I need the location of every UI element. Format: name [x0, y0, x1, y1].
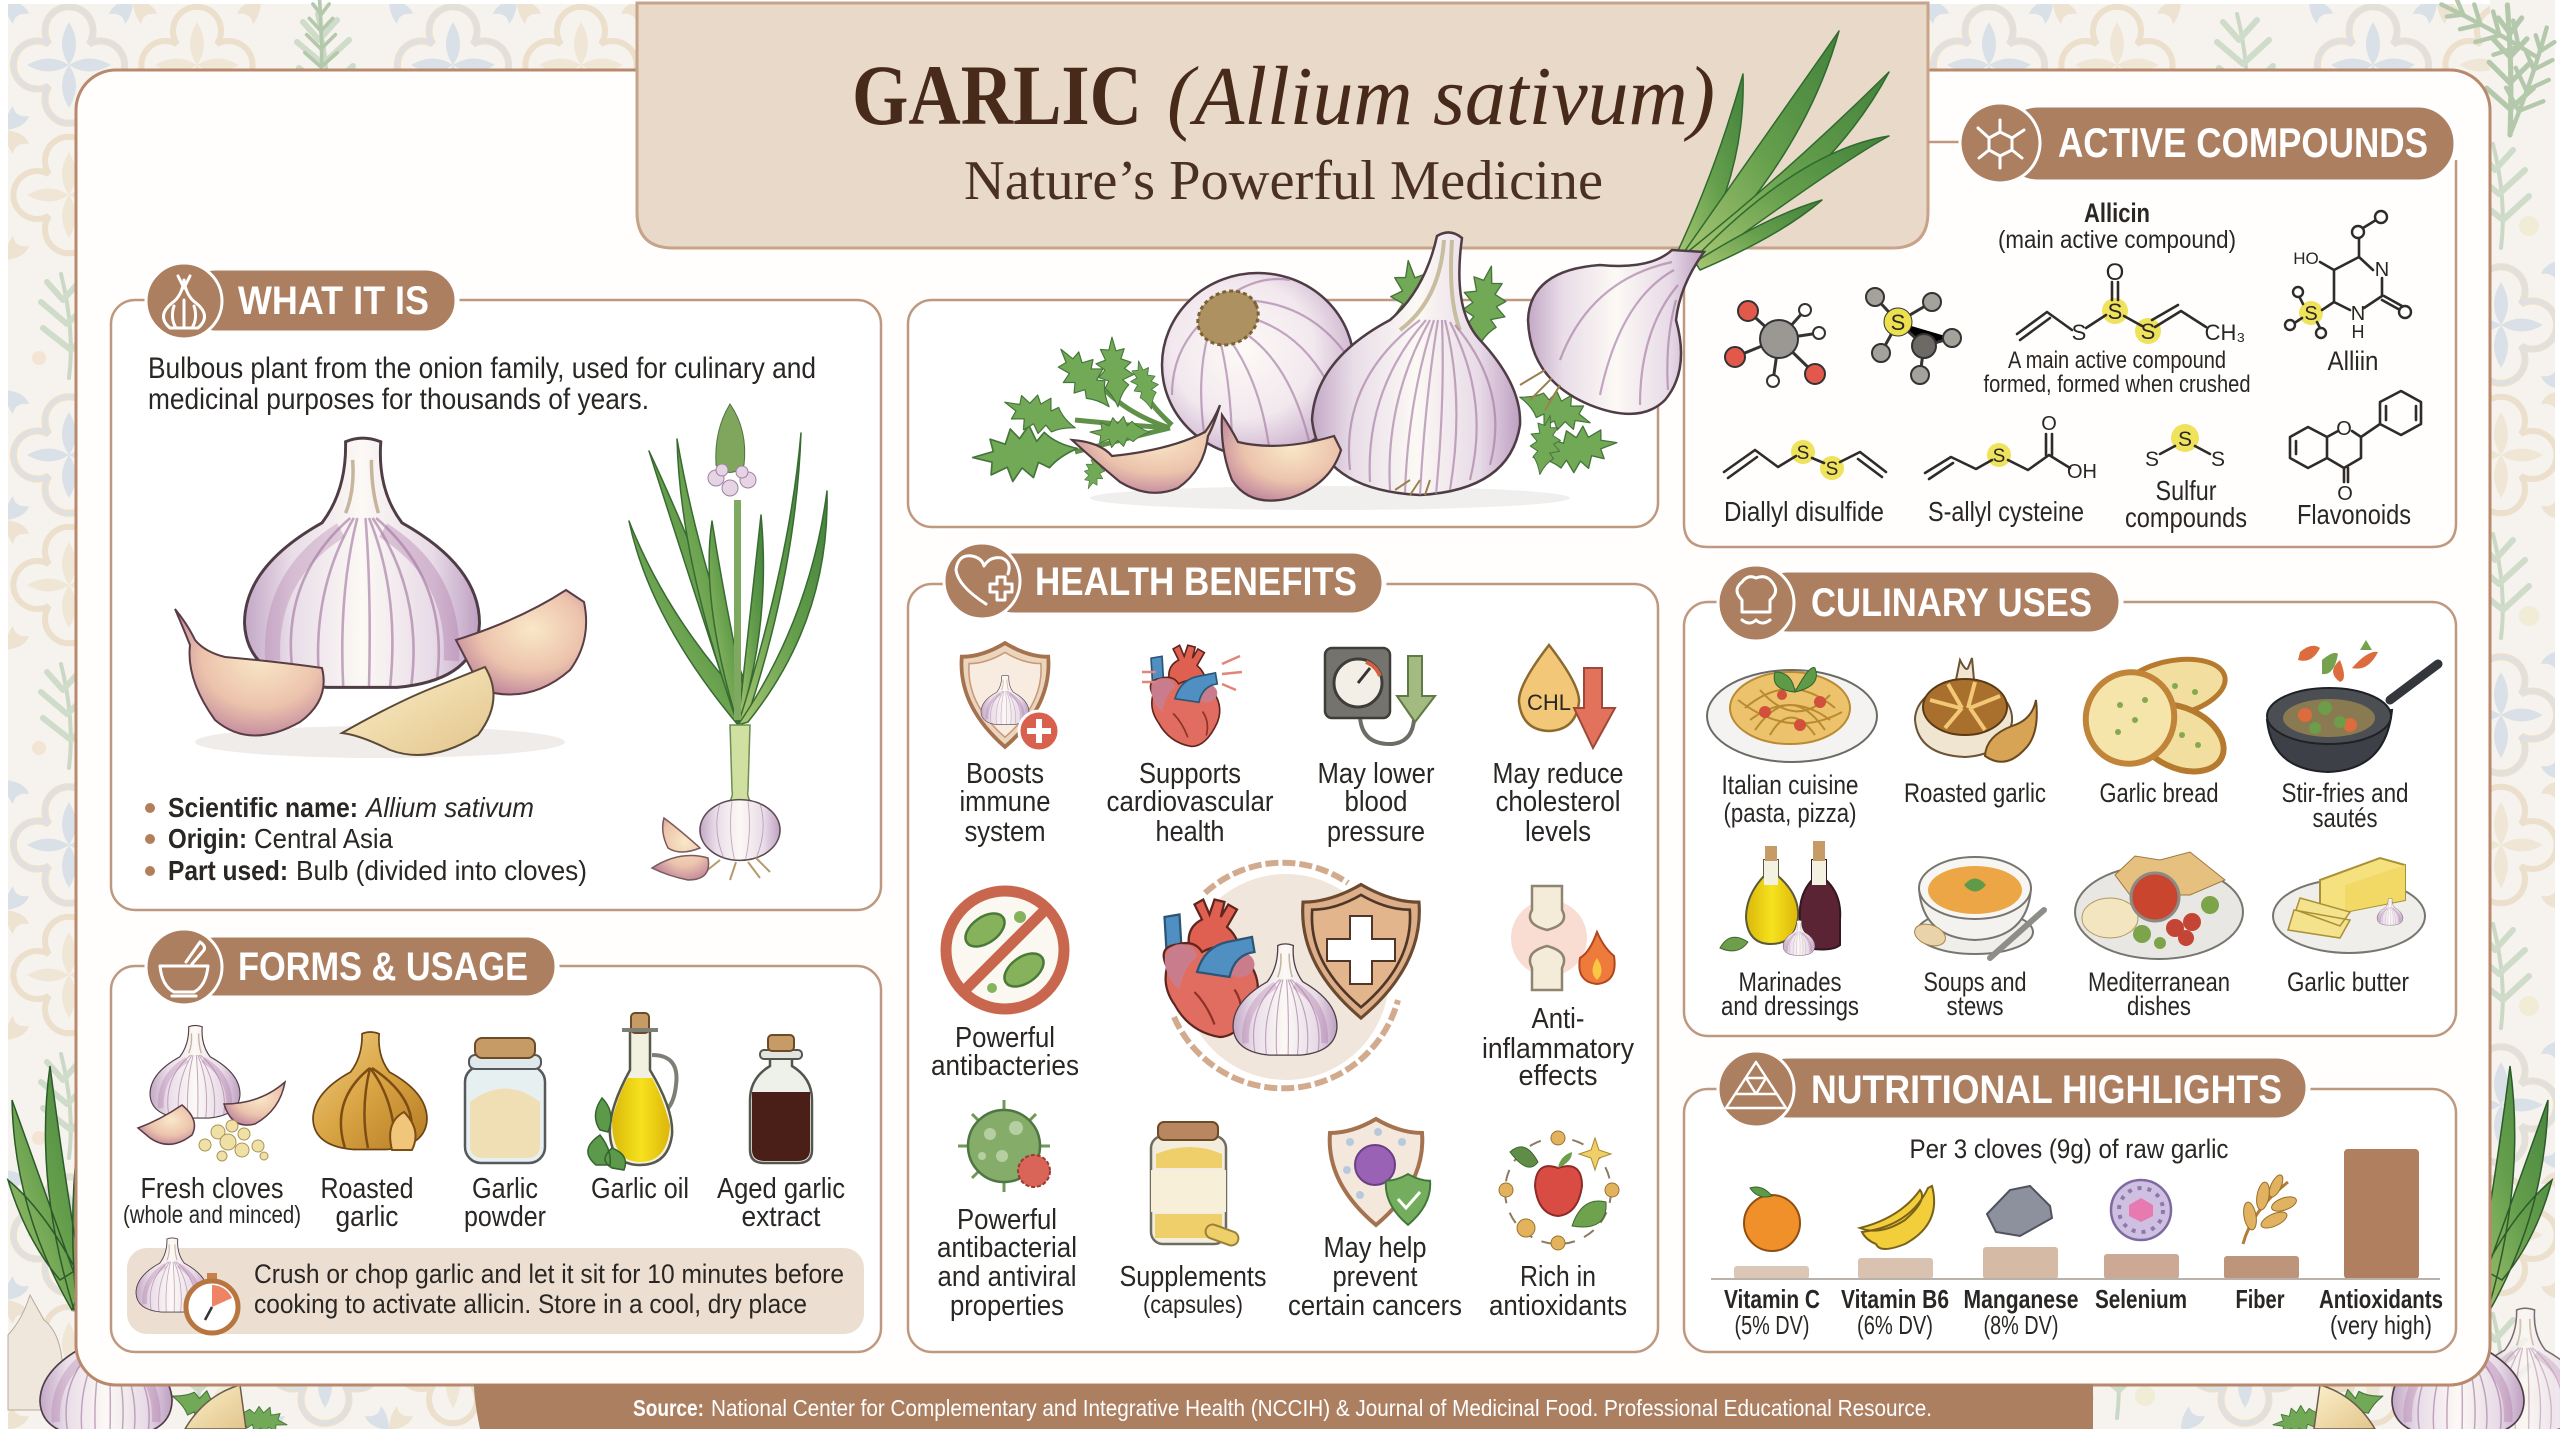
compound: diallyl disulfide: S: [1826, 459, 1838, 480]
compound: diallyl disulfide: [1724, 440, 1886, 527]
benefit: cholesterol: May reduce: [1492, 758, 1624, 790]
compound: s-allyl cysteine: S-allyl cysteine: [1928, 496, 2084, 527]
compound: flavonoids: Flavonoids: [2297, 499, 2411, 530]
compound: allicin: A main active compound: [2008, 347, 2226, 374]
benefit: anti-inflammatory: Anti-: [1532, 1003, 1584, 1035]
benefit: cardiovascular: cardiovascular: [1106, 786, 1274, 818]
facts list: Bulb (divided into cloves): [296, 855, 587, 886]
benefit: cholesterol: [1492, 645, 1624, 848]
benefit: supplements: [1120, 1122, 1266, 1319]
heading: forms and usage: [146, 929, 557, 1005]
heading: culinary uses: CULINARY USES: [1811, 581, 2092, 625]
molecule: ball and stick two: S: [1891, 310, 1905, 335]
compound: flavonoids: O: [2337, 483, 2353, 505]
benefit: antibacteries: Powerful: [955, 1022, 1055, 1054]
heading: nutritional highlights: NUTRITIONAL HIGHLIGHTS: [1811, 1068, 2282, 1112]
dish: marinades: and dressings: [1721, 991, 1859, 1021]
benefit: antibacterial and antiviral: and antiviral: [938, 1261, 1076, 1293]
compound: sulfur compounds: S: [2145, 448, 2159, 471]
dish: soups and stews: Soups and: [1924, 967, 2026, 997]
item: garlic oil: [588, 1013, 689, 1205]
labels: nutrients: (6% DV): [1857, 1310, 1933, 1340]
compound: allicin: S: [2108, 299, 2122, 324]
compound: alliin: Alliin: [2328, 346, 2378, 376]
panel: nutritional highlights: [1684, 1051, 2456, 1352]
panel: hero frame: [908, 300, 1658, 527]
icon: orange: [1744, 1187, 1800, 1251]
heading: forms and usage: FORMS & USAGE: [238, 945, 528, 989]
dish: italian cuisine: Italian cuisine: [1722, 770, 1858, 800]
dish: garlic bread: Garlic bread: [2100, 778, 2218, 808]
subtitle: Nature’s Powerful Medicine: [964, 150, 1603, 212]
labels: nutrients: Vitamin C: [1724, 1284, 1820, 1314]
panel: culinary uses: [1684, 565, 2456, 1036]
compound: flavonoids: O: [2336, 418, 2352, 440]
dish: soups and stews: stews: [1946, 991, 2004, 1021]
dish: stir fries: Stir-fries and: [2282, 778, 2408, 808]
benefit: cholesterol: levels: [1525, 816, 1591, 848]
compound: sulfur compounds: Sulfur: [2156, 475, 2216, 506]
labels: nutrients: Vitamin B6: [1841, 1284, 1949, 1314]
labels: nutrients: (5% DV): [1734, 1310, 1810, 1340]
footer source bar: National Center for Complementary and Integrative Health (NCCIH) & Journal of Medicinal Food. Professional Educational Resource.: [711, 1395, 1932, 1421]
dish: italian cuisine: (pasta, pizza): [1724, 798, 1856, 828]
item: garlic powder: Garlic: [472, 1173, 538, 1205]
decoration: bottom left garlic plant: [8, 1066, 290, 1429]
panel: health benefits: [908, 543, 1658, 1352]
compound: s-allyl cysteine: [1925, 413, 2097, 527]
center bulb: [1312, 232, 1520, 495]
facts list: Part used:: [168, 855, 288, 886]
icon: garlic with stopwatch: [136, 1238, 238, 1333]
benefit: cancer prevention: May help: [1324, 1232, 1426, 1264]
icon: banana: [1860, 1186, 1934, 1249]
benefit: supplements: Supplements: [1120, 1261, 1266, 1293]
dish: stir fries: sautés: [2312, 803, 2378, 833]
central emblem: heart, garlic and shield: [1164, 863, 1419, 1088]
labels: nutrients: (8% DV): [1984, 1310, 2058, 1340]
benefit: antibacterial and antiviral: [937, 1100, 1077, 1322]
benefit: antioxidants: [1489, 1131, 1627, 1322]
callout: preparation tip: cooking to activate allicin. Store in a cool, dry place: [254, 1289, 807, 1319]
dish: stir fries: [2267, 640, 2438, 833]
benefit: cardiovascular: health: [1156, 816, 1224, 848]
benefit: antibacteries: antibacteries: [931, 1050, 1079, 1082]
compound: allicin: O: [2106, 259, 2124, 286]
facts list: Origin:: [168, 823, 247, 854]
bar chart: nutrients: [1711, 1149, 2440, 1279]
compound: alliin: HO: [2293, 249, 2319, 268]
dish: soups and stews: [1912, 857, 2044, 1021]
compound: sulfur compounds: S: [2211, 448, 2225, 471]
footer source bar: Source:: [633, 1395, 704, 1421]
benefit: antioxidants: antioxidants: [1489, 1290, 1627, 1322]
compound: alliin: N: [2375, 259, 2389, 281]
item: aged garlic extract: extract: [742, 1201, 820, 1233]
benefit: blood pressure: pressure: [1327, 816, 1425, 848]
heading: active compounds: ACTIVE COMPOUNDS: [2058, 119, 2428, 166]
dish: garlic bread: [2073, 650, 2234, 808]
labels: nutrients: [1724, 1284, 2443, 1340]
benefit: anti-inflammatory: inflammatory: [1482, 1033, 1634, 1065]
garlic cloves: [1072, 405, 1341, 501]
title banner: [637, 3, 1928, 248]
item: garlic powder: [464, 1038, 546, 1233]
dish: mediterranean: dishes: [2127, 991, 2191, 1021]
dish: marinades: Marinades: [1738, 967, 1842, 997]
heading: active compounds: [1960, 103, 2456, 183]
compound: diallyl disulfide: S: [1797, 443, 1809, 464]
dish: garlic butter: [2273, 858, 2425, 997]
compound: sulfur compounds: [2125, 424, 2247, 533]
icon: wheat: [2242, 1173, 2298, 1244]
heading: what it is: WHAT IT IS: [238, 279, 429, 323]
panel: active compounds: [1684, 103, 2456, 547]
facts list: Scientific name:: [168, 792, 358, 823]
benefit: cholesterol: cholesterol: [1496, 786, 1620, 818]
labels: nutrients: (very high): [2330, 1310, 2432, 1340]
dish: garlic butter: Garlic butter: [2287, 967, 2409, 997]
serving note: Per 3 cloves (9g) of raw garlic: [1910, 1134, 2228, 1164]
benefit: antibacterial and antiviral: properties: [950, 1290, 1064, 1322]
heading: health benefits: HEALTH BENEFITS: [1035, 560, 1357, 604]
benefit: immune system: immune: [960, 786, 1050, 818]
item: garlic oil: Garlic oil: [591, 1173, 689, 1205]
benefit: immune system: Boosts: [966, 758, 1044, 790]
description: [148, 352, 816, 416]
callout: preparation tip: Crush or chop garlic and let it sit for 10 minutes before: [254, 1259, 844, 1289]
dish: mediterranean: Mediterranean: [2088, 967, 2230, 997]
compound: alliin: N: [2351, 303, 2365, 325]
compound: s-allyl cysteine: O: [2041, 413, 2057, 435]
compound: allicin: (main active compound): [1998, 226, 2236, 254]
dish: roasted garlic: [1904, 658, 2046, 808]
benefit: immune system: [960, 643, 1059, 848]
hero illustration: garlic bulbs, cloves and parsley: [970, 31, 1889, 510]
parsley: [970, 257, 1621, 492]
right bulb and green shoots: [1520, 31, 1889, 414]
compound: sulfur compounds: compounds: [2125, 502, 2247, 533]
benefit: cancer prevention: certain cancers: [1288, 1290, 1462, 1322]
compound: s-allyl cysteine: S: [1993, 446, 2005, 467]
item: roasted garlic: Roasted: [320, 1173, 414, 1205]
illustration: garlic bulb and cloves: [175, 438, 586, 758]
compound: flavonoids: [2290, 391, 2421, 530]
description: Bulbous plant from the onion family, used for culinary and: [148, 352, 816, 385]
benefit: antioxidants: Rich in: [1520, 1261, 1596, 1293]
title: (Allium sativum): [1167, 50, 1715, 143]
item: roasted garlic: garlic: [336, 1201, 398, 1233]
compound: allicin: CH₃: [2205, 320, 2245, 345]
heading: nutritional highlights: [1718, 1051, 2308, 1127]
panel: forms and usage: [111, 929, 881, 1352]
benefit: cholesterol: CHL: [1527, 690, 1571, 715]
item: garlic powder: powder: [464, 1201, 546, 1233]
compound: allicin: Allicin: [2084, 198, 2150, 228]
compound: sulfur compounds: S: [2178, 428, 2192, 451]
benefit: antibacteries: [931, 891, 1079, 1082]
facts list: Central Asia: [254, 823, 393, 854]
dish: mediterranean: [2075, 852, 2243, 1021]
compound: allicin: S: [2072, 320, 2086, 345]
compound: s-allyl cysteine: OH: [2067, 461, 2097, 483]
heading: what it is: [146, 263, 457, 339]
heading: health benefits: [944, 543, 1384, 619]
benefit: immune system: system: [964, 816, 1046, 848]
facts list: [145, 792, 587, 886]
compound: allicin: formed, formed when crushed: [1984, 371, 2250, 398]
illustration: garlic plant: [629, 404, 827, 880]
compound: alliin: [2285, 211, 2411, 376]
compound: alliin: H: [2352, 322, 2364, 342]
benefit: antibacterial and antiviral: Powerful: [957, 1204, 1057, 1236]
heading: culinary uses: [1718, 565, 2121, 641]
benefit: blood pressure: May lower: [1318, 758, 1435, 790]
labels: nutrients: Selenium: [2095, 1284, 2187, 1314]
dish: marinades: [1720, 841, 1859, 1021]
benefit: anti-inflammatory: effects: [1518, 1060, 1598, 1092]
panel: what it is: [111, 263, 881, 910]
footer source bar: [474, 1384, 2093, 1429]
item: fresh cloves: [123, 1025, 301, 1229]
item: fresh cloves: Fresh cloves: [140, 1173, 284, 1205]
item: fresh cloves: (whole and minced): [123, 1201, 301, 1229]
compound: allicin: [1984, 198, 2250, 398]
item: roasted garlic: [313, 1032, 427, 1233]
facts list: Allium sativum: [364, 792, 534, 823]
description: medicinal purposes for thousands of years.: [148, 383, 649, 416]
benefit: supplements: (capsules): [1143, 1291, 1243, 1319]
benefit: anti-inflammatory: [1482, 886, 1634, 1092]
molecule: ball and stick two: [1866, 288, 1961, 384]
compound: allicin: S: [2141, 319, 2155, 344]
dish: italian cuisine: [1707, 668, 1877, 828]
labels: nutrients: Manganese: [1964, 1284, 2078, 1314]
benefit: cardiovascular: [1106, 645, 1274, 848]
benefit: cancer prevention: [1288, 1119, 1462, 1322]
labels: nutrients: Fiber: [2236, 1284, 2284, 1314]
item: aged garlic extract: Aged garlic: [717, 1173, 845, 1205]
benefit: cardiovascular: Supports: [1139, 758, 1241, 790]
dish: roasted garlic: Roasted garlic: [1904, 778, 2046, 808]
compound: alliin: S: [2304, 303, 2318, 325]
benefit: blood pressure: blood: [1344, 786, 1408, 818]
title: [852, 47, 1715, 143]
item: aged garlic extract: [717, 1035, 845, 1233]
left bulb: [1162, 273, 1354, 457]
decoration: bottom right garlic plant: [2270, 1066, 2560, 1429]
molecule: ball and stick one: [1725, 301, 1825, 387]
benefit: antibacterial and antiviral: antibacterial: [937, 1232, 1077, 1264]
icon: selenium: [2111, 1180, 2171, 1240]
labels: nutrients: Antioxidants: [2319, 1284, 2443, 1314]
icon: manganese rock: [1987, 1186, 2052, 1236]
title: GARLIC: [852, 47, 1142, 143]
benefit: cancer prevention: prevent: [1332, 1261, 1418, 1293]
benefit: blood pressure: [1318, 648, 1435, 848]
compound: diallyl disulfide: Diallyl disulfide: [1724, 496, 1884, 527]
callout: preparation tip: [127, 1238, 864, 1334]
